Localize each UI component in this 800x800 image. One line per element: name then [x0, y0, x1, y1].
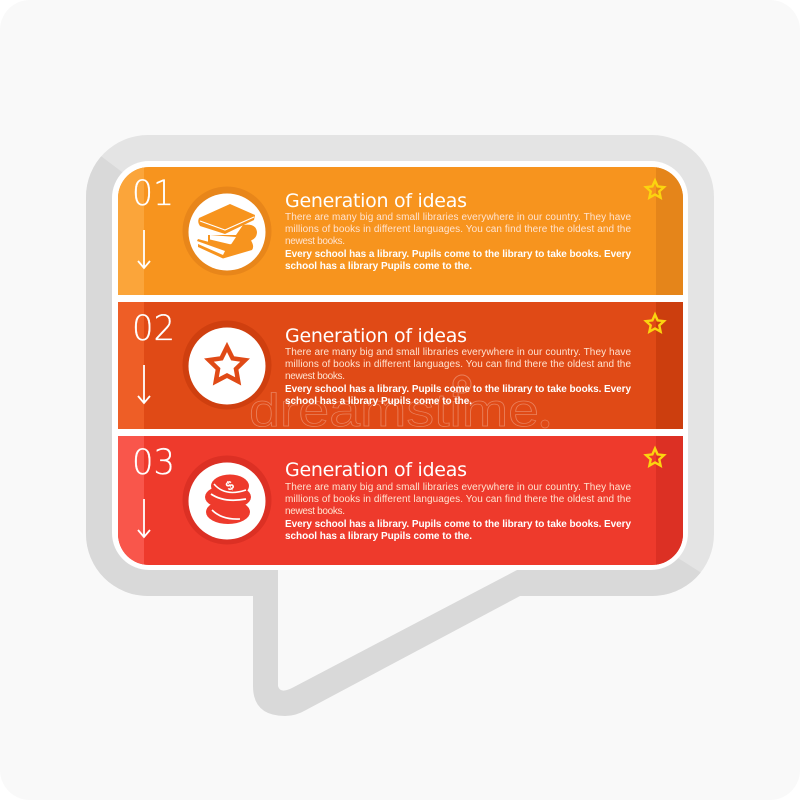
- text block 02: Every school has a library. Pupils come to the library to take books. Every: [285, 384, 631, 395]
- number 01: 01: [132, 174, 174, 214]
- arrow 03: [138, 499, 150, 537]
- icon: star badge: [182, 320, 272, 410]
- text block 03: [285, 482, 631, 542]
- arrow 02: [138, 365, 150, 403]
- panel: step 03: [132, 443, 664, 544]
- heading 03: Generation of ideas: [285, 459, 467, 481]
- panel: row backgrounds: [118, 167, 683, 565]
- icon: coins: [182, 456, 272, 544]
- text block 01: millions of books in different languages. You can find there the oldest and the: [285, 224, 631, 235]
- text block 02: newest books.: [285, 371, 345, 382]
- icon: star 02: [646, 314, 664, 332]
- speech bubble tail: [253, 590, 520, 716]
- text block 01: [285, 212, 631, 272]
- icon: coins: $: [223, 477, 237, 494]
- tail inner cut-out: [278, 560, 517, 691]
- text block 03: There are many big and small libraries everywhere in our country. They have: [285, 482, 631, 493]
- number 02: 02: [132, 309, 175, 349]
- text block 01: Every school has a library. Pupils come to the library to take books. Every: [285, 249, 631, 260]
- heading 02: Generation of ideas: [285, 325, 467, 347]
- text block 02: millions of books in different languages. You can find there the oldest and the: [285, 359, 631, 370]
- number 03: 03: [132, 443, 175, 483]
- text block 03: school has a library Pupils come to the.: [285, 531, 472, 542]
- text block 01: school has a library Pupils come to the.: [285, 261, 472, 272]
- white panel border: [112, 161, 688, 570]
- speech bubble outline: [86, 135, 714, 716]
- panel: step 01: [132, 174, 664, 276]
- text block 03: millions of books in different languages. You can find there the oldest and the: [285, 494, 631, 505]
- heading 01: Generation of ideas: [285, 190, 467, 212]
- text block 02: There are many big and small libraries everywhere in our country. They have: [285, 347, 631, 358]
- text block 01: newest books.: [285, 236, 345, 247]
- icon: books: [182, 186, 272, 276]
- watermark: dreamstime: [249, 384, 539, 436]
- text block 01: There are many big and small libraries everywhere in our country. They have: [285, 212, 631, 223]
- text block 02: [285, 347, 631, 407]
- panel: step 02: [132, 309, 664, 410]
- icon: star 03: [646, 448, 664, 466]
- watermark: [249, 375, 549, 436]
- icon: star 01: [646, 180, 664, 198]
- text block 03: Every school has a library. Pupils come to the library to take books. Every: [285, 519, 631, 530]
- text block 03: newest books.: [285, 506, 345, 517]
- arrow 01: [138, 230, 150, 268]
- text block 02: school has a library Pupils come to the.: [285, 396, 472, 407]
